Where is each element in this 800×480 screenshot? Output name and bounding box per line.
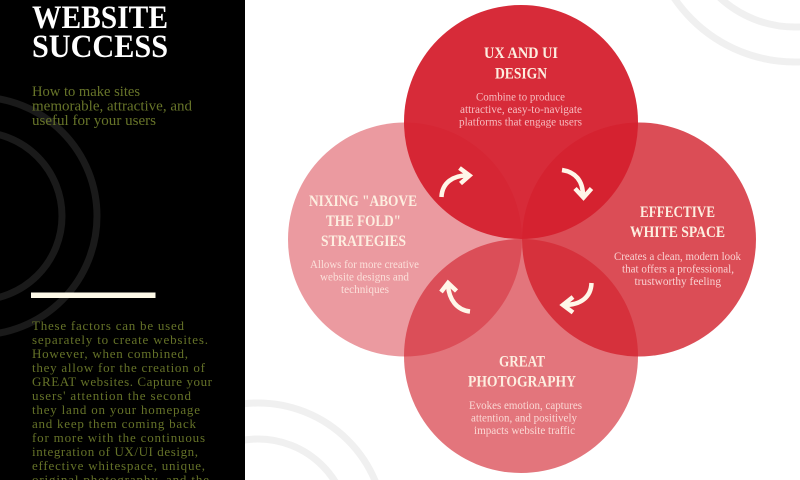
text: great photography: GREAT [499, 354, 546, 370]
circle: great photography [404, 239, 638, 473]
body paragraph: These factors can be used [32, 318, 184, 333]
panel: left sidebar [0, 0, 245, 480]
text: nixing above the fold: THE FOLD" [326, 213, 401, 230]
text: ux and ui design: Combine to produce [476, 92, 565, 104]
text: great photography [468, 354, 582, 437]
text: effective white space: WHITE SPACE [630, 224, 725, 241]
title: WEBSITE [32, 0, 168, 36]
body paragraph [32, 318, 213, 480]
subtitle: How to make sites [32, 84, 140, 100]
title [32, 0, 168, 65]
text: effective white space: trustworthy feeling [634, 276, 721, 288]
text: ux and ui design: DESIGN [495, 66, 547, 82]
diagram: four overlapping circles [288, 5, 756, 473]
text: nixing above the fold: website designs and [320, 272, 409, 284]
subtitle [32, 84, 192, 129]
text: great photography: PHOTOGRAPHY [468, 374, 576, 390]
text: effective white space: that offers a professional, [622, 264, 734, 276]
arrow: bottom to left [441, 283, 470, 312]
title: SUCCESS [32, 29, 168, 65]
subtitle: memorable, attractive, and [32, 98, 192, 114]
text: nixing above the fold: Allows for more creative [310, 259, 419, 271]
body paragraph: they land on your homepage [32, 402, 200, 417]
text: ux and ui design [459, 45, 583, 128]
body paragraph: effective whitespace, unique, [32, 458, 205, 473]
circle: nixing above the fold [288, 122, 522, 356]
body paragraph: and keep them coming back [32, 416, 196, 431]
arrow: left to top [442, 168, 470, 197]
body paragraph: GREAT websites. Capture your [32, 374, 213, 389]
text: ux and ui design: attractive, easy-to-navigate [460, 104, 582, 116]
text: effective white space [614, 204, 741, 288]
text: great photography: impacts website traffic [474, 425, 575, 437]
arrow: right to bottom [563, 283, 592, 312]
body paragraph: they allow for the creation of [32, 360, 206, 375]
text: great photography: Evokes emotion, captures [469, 400, 582, 412]
arrow: top to right [562, 170, 592, 198]
text: ux and ui design: platforms that engage users [459, 116, 583, 128]
text: nixing above the fold: techniques [341, 284, 390, 296]
text: nixing above the fold: NIXING "ABOVE [309, 193, 417, 210]
circle: ux and ui design [404, 5, 638, 239]
body paragraph: for more with the continuous [32, 430, 205, 445]
text: effective white space: Creates a clean, modern look [614, 251, 741, 263]
text: nixing above the fold: STRATEGIES [321, 233, 406, 250]
text: great photography: attention, and positively [471, 412, 577, 424]
text: nixing above the fold [309, 193, 419, 296]
body paragraph: separately to create websites. [32, 332, 208, 347]
divider bar [31, 292, 156, 298]
subtitle: useful for your users [32, 113, 156, 129]
text: ux and ui design: UX AND UI [484, 45, 558, 62]
body paragraph: users' attention the second [32, 388, 192, 403]
text: effective white space: EFFECTIVE [640, 204, 715, 221]
body paragraph: integration of UX/UI design, [32, 444, 198, 459]
circle: effective white space [522, 122, 756, 356]
body paragraph: However, when combined, [32, 346, 188, 361]
